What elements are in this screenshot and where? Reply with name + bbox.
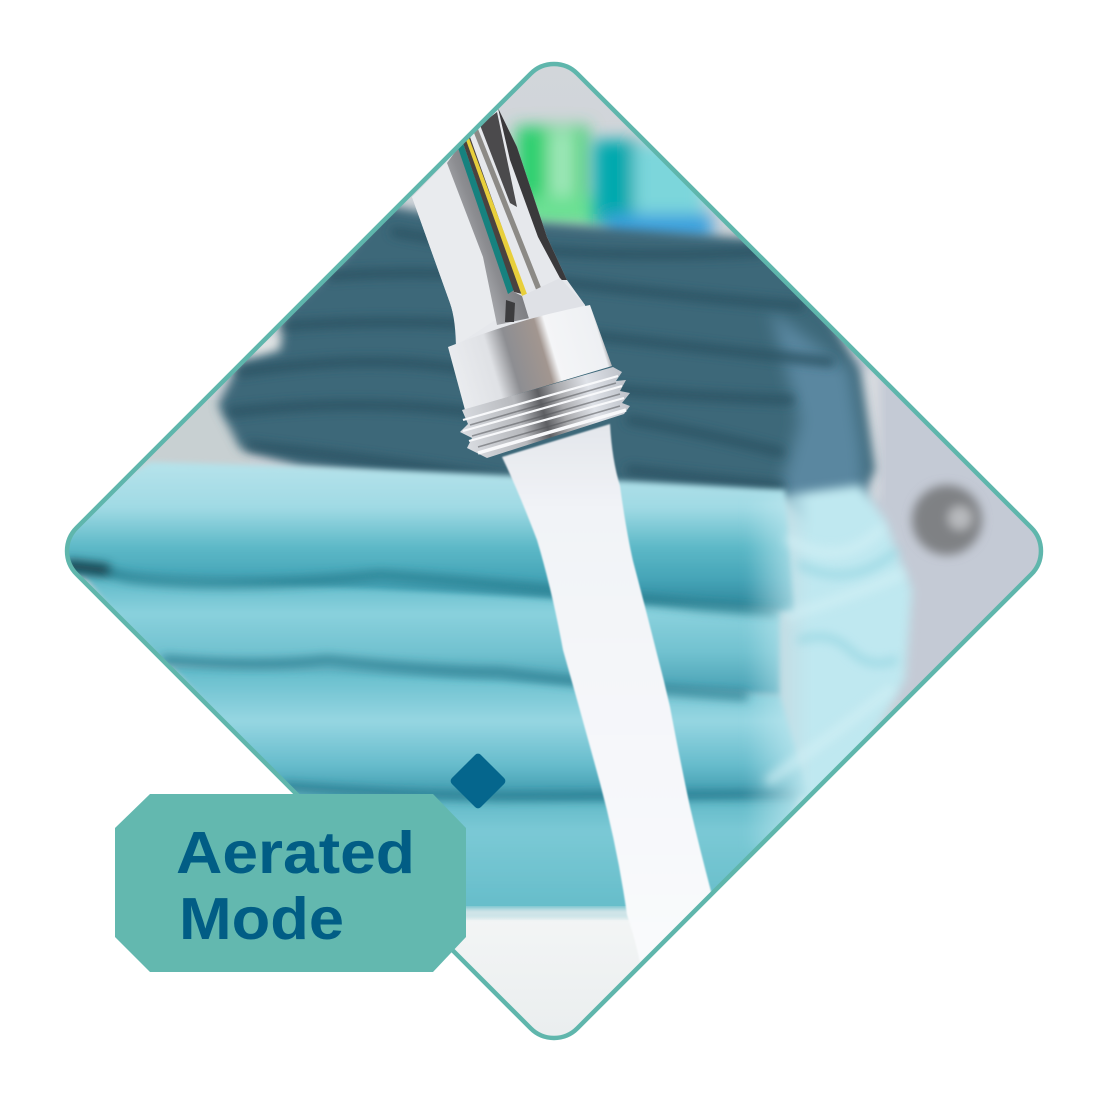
- dark towel stack: [218, 205, 875, 540]
- thread highlights: [463, 376, 626, 453]
- faucet spout tube: [412, 108, 590, 352]
- light teal towel stack: [60, 462, 912, 918]
- faucet collar: [448, 305, 612, 410]
- blurred wall knob: [912, 485, 982, 555]
- third towel: [170, 665, 810, 799]
- gray reflection band: [447, 148, 530, 325]
- pale folded towel ends: [745, 485, 912, 850]
- infographic canvas: [64, 62, 1044, 1040]
- faucet: [412, 108, 630, 458]
- blurred teal bottle: [594, 140, 712, 242]
- colored spout reflections: [458, 108, 567, 322]
- small diamond marker: [449, 752, 507, 810]
- threaded aerator end: [460, 367, 630, 458]
- top towel: [60, 462, 795, 612]
- towel fold creases: [66, 566, 795, 797]
- water stream: [502, 424, 712, 962]
- blurred green bottle: [516, 126, 602, 226]
- fourth towel: [280, 790, 800, 915]
- second towel: [80, 570, 780, 695]
- left white band shading: [414, 202, 454, 316]
- label text: Aerated: [176, 820, 415, 886]
- label text: Mode: [179, 886, 344, 952]
- label badge: Aerated Mode: [115, 794, 466, 972]
- soft right-end highlights: [770, 530, 900, 780]
